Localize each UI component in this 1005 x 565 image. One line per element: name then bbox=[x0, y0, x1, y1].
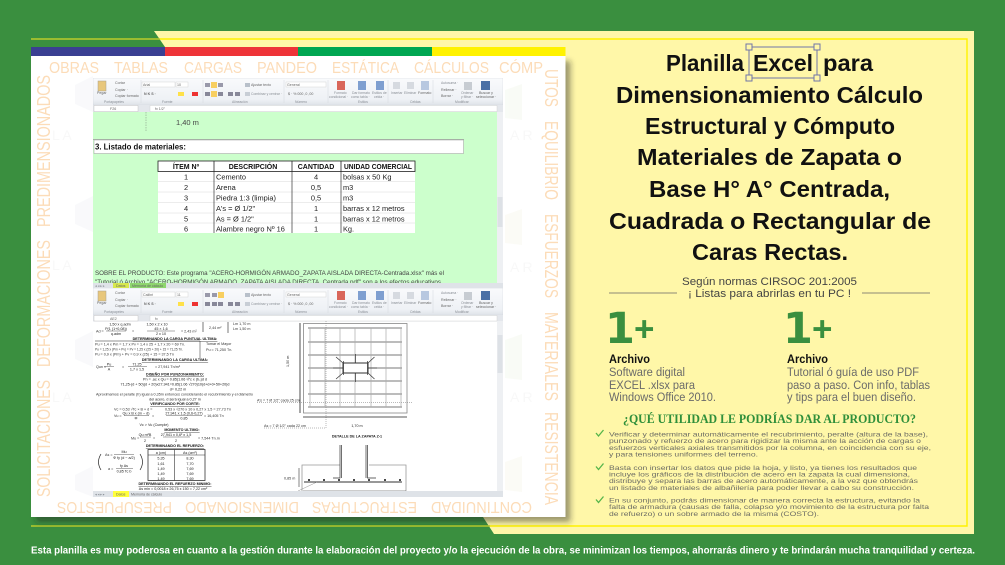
ribbon bottom: Formato bbox=[418, 301, 431, 305]
border words: left: SOLICITACIONES bbox=[34, 380, 54, 497]
sheet tabs bbox=[93, 491, 503, 497]
materials table: 4 bbox=[184, 204, 188, 213]
subtitle: Según normas CIRSOC 201:2005 bbox=[682, 276, 857, 288]
materials table: 5 bbox=[184, 214, 188, 224]
ribbon top: y filtrar · bbox=[461, 95, 473, 99]
calculation text: Vc = 0,53 √f'c × B × d = bbox=[114, 408, 152, 412]
reinforcement formula: Mu bbox=[121, 450, 127, 454]
ribbon bottom: Estilos de bbox=[372, 301, 387, 305]
calculation text: Tomar el Mayor bbox=[206, 342, 232, 346]
ribbon bottom: Borrar · bbox=[441, 304, 453, 308]
ribbon top: Arial bbox=[143, 83, 150, 87]
ribbon bottom: condicional · bbox=[329, 305, 348, 309]
ribbon bottom: Eliminar bbox=[404, 301, 417, 305]
ribbon bottom: Alineación bbox=[232, 310, 248, 314]
ribbon bottom: Ajustar texto bbox=[251, 293, 271, 297]
bullet: insert data: Basta con insertar los datos que pide la hoja, y listo, ya tienes los resultados que bbox=[609, 465, 917, 472]
calculation text: A bbox=[108, 368, 111, 372]
ribbon top: Copiar · bbox=[115, 88, 128, 92]
plan drawing of footing: A's = 7 Ø 1/2" cada 25 cm bbox=[257, 398, 300, 402]
ribbon top bbox=[93, 78, 503, 105]
ribbon bottom: $ · % 000 ,0 ,00 bbox=[288, 302, 313, 306]
ribbon top: $ · % 000 ,0 ,00 bbox=[288, 92, 313, 96]
steel iteration table: 7,69 bbox=[186, 472, 194, 476]
steel iteration table: 1,49 bbox=[157, 472, 165, 476]
border words: bottom bbox=[57, 498, 532, 515]
materials table: m3 bbox=[343, 194, 353, 202]
ribbon bottom: Portapapeles bbox=[104, 310, 124, 314]
calculation text: = bbox=[132, 330, 134, 334]
calculation text: 71,25 bbox=[132, 362, 142, 366]
steel iteration table: 7,69 bbox=[186, 467, 194, 471]
stat: PDF tutorial: Archivo bbox=[787, 352, 828, 366]
calculation text: Vu = bbox=[114, 414, 122, 418]
steel iteration table: As (cm²) bbox=[183, 451, 197, 455]
excel screenshot: materials list bbox=[93, 78, 503, 288]
materials table bbox=[158, 161, 415, 234]
ribbon top: Número bbox=[295, 100, 307, 104]
white sheet card bbox=[31, 56, 566, 517]
main title: para bbox=[823, 50, 873, 76]
ribbon bottom: como tabla · bbox=[351, 305, 370, 309]
materials table: 0,5 bbox=[311, 194, 321, 202]
border words: left bbox=[34, 75, 54, 497]
sheet tabs: ◂ ◂ ▸ ▸ bbox=[95, 492, 105, 496]
reinforcement formula: DETERMINANDO EL REFUERZO MINIMO: bbox=[138, 482, 212, 486]
calculation text: 2 bbox=[144, 439, 146, 443]
calculation text: Pu = 0,9 x (Pm) + Pv = 0,9 x (25) + 15 = 37,5 Tn bbox=[95, 352, 174, 356]
ribbon top: Rellenar · bbox=[441, 88, 457, 92]
plan drawing of footing: 1,70 m bbox=[351, 424, 363, 428]
reinforcement formula: fy As bbox=[120, 464, 128, 468]
ribbon top: Estilos bbox=[358, 100, 368, 104]
reinforcement formula: 0,85 f'c b bbox=[117, 470, 131, 474]
calculation text: 27,941 x 1,5 (0,6-0,27) bbox=[165, 412, 203, 416]
calculation text: Ad = bbox=[96, 330, 104, 334]
section detail drawing bbox=[284, 434, 406, 491]
formula bar bbox=[93, 105, 503, 112]
calculation text: Aproximamos el peralte (h) igual a 0,35m entonces considerando el recubrimiento y el diámetro bbox=[96, 392, 253, 396]
subtitle: ¡ Listas para abrirlas en tu PC ! bbox=[688, 288, 851, 300]
materials table: 1 bbox=[314, 204, 318, 213]
border words: left: PREDIMENSIONADOS bbox=[34, 75, 54, 227]
calculation text: del acero, d será igual a 0,27 m bbox=[149, 398, 201, 402]
calculation text: MOMENTO ULTIMO: bbox=[164, 428, 200, 432]
materials table: 1 bbox=[184, 172, 188, 182]
ribbon top: Celdas bbox=[410, 100, 421, 104]
calculation text: 2 x 10 bbox=[156, 332, 166, 336]
ribbon bottom: Celdas bbox=[410, 310, 421, 314]
border words: top: CÓMP bbox=[499, 60, 543, 77]
section detail drawing: DETALLE DE LA ZAPATA Z-1 bbox=[332, 434, 382, 438]
bullet: verify: Verificar y determinar automáticamente el recubrimiento, peralte (altura de la base), bbox=[609, 432, 928, 438]
border words: right: MATERIALES bbox=[541, 312, 561, 401]
calculation text: 71,25-(d + 50)(d + 20)x27,941=0.85(1.06 √270)10(d+d+0+50+20)d bbox=[121, 382, 229, 386]
main title: Excel bbox=[753, 50, 813, 76]
calculation text: 1,50 x q.adm bbox=[109, 322, 131, 326]
ribbon top: 10 bbox=[177, 83, 181, 87]
steel iteration table: 7,69 bbox=[186, 477, 194, 481]
sheet tabs: Memoria de cálculo bbox=[131, 492, 162, 496]
main title: Base H° A° Centrada, bbox=[649, 176, 890, 202]
calculation text: DETERMINANDO LA CARGA PUNTUAL ULTIMA: bbox=[133, 337, 217, 341]
utility heading: ¿QUÉ UTILIDAD LE PODRÍAS DAR AL PRODUCTO? bbox=[623, 411, 916, 426]
border words: right: UTOS bbox=[541, 69, 561, 107]
materials table: 4 bbox=[314, 172, 318, 182]
calculation text: Pu = 1,25 x (Pm + Pv) = Pv = 1,25 x (25 + 20) + 15 = 71,25 Tn. bbox=[95, 348, 183, 352]
ribbon top: celda · bbox=[374, 95, 384, 99]
ribbon top: Borrar · bbox=[441, 94, 453, 98]
steel iteration table: a (cm) bbox=[156, 451, 166, 455]
calculation text: Vc > Vu (Cumple) bbox=[139, 423, 169, 427]
faint logo watermarks: A R bbox=[510, 389, 533, 405]
ribbon bottom: Formato bbox=[334, 301, 347, 305]
calculation text: Lm 1,50 m bbox=[233, 327, 250, 331]
calculation text: 0,53 x √270 x 10 x 0,27 x 1,5 = 27,73 Tn bbox=[165, 408, 231, 412]
calculation text: Lm 1,70 m bbox=[233, 322, 250, 326]
faint logo watermarks: L A bbox=[52, 127, 72, 143]
calculation text bbox=[95, 322, 253, 448]
calculation text: = bbox=[152, 414, 154, 418]
materials table: As = Ø 1/2" bbox=[216, 214, 254, 224]
main title: Estructural y Cómputo bbox=[645, 113, 895, 139]
calculation text: Pu = 1,4 x Pm = 1,7 x Pv = 1,4 x 25 + 1,7 x 20 = 69 Tn. bbox=[95, 342, 185, 346]
ribbon bottom: Dar formato bbox=[352, 301, 370, 305]
colour strip bbox=[31, 47, 566, 56]
ribbon bottom: Calibri bbox=[143, 293, 153, 297]
calculation text: P(1 (1+0,08)) bbox=[105, 327, 127, 331]
bullet: overall: En su conjunto, podrás dimensionar de manera correcta la estructura, evitando la bbox=[609, 498, 920, 504]
sheet tabs: ◂ ◂ ▸ ▸ bbox=[95, 284, 105, 288]
border words: top: CÁLCULOS bbox=[414, 60, 489, 77]
calculation text: d= 0,22 m bbox=[170, 388, 186, 392]
calculation text: DETERMINANDO EL REFUERZO: bbox=[146, 444, 204, 448]
ribbon top: Fuente bbox=[162, 100, 173, 104]
calculation text: = bbox=[122, 365, 124, 369]
sheet tabs: Datos bbox=[116, 284, 126, 288]
calculation text: Pu bbox=[107, 362, 111, 366]
plan drawing of footing: 1,50 m bbox=[286, 356, 290, 367]
faint logo watermarks: A R bbox=[510, 127, 533, 143]
calculation text: Pu = 71,250 Tn. bbox=[206, 348, 232, 352]
materials table: Piedra 1:3 (limpia) bbox=[216, 194, 276, 202]
ribbon bottom: Rellenar · bbox=[441, 298, 457, 302]
sheet tabs: Datos bbox=[116, 492, 126, 496]
steel iteration table: 1,61 bbox=[157, 462, 165, 466]
plan drawing of footing bbox=[257, 321, 413, 428]
scrollbar bbox=[497, 112, 503, 283]
materials table: barras x 12 metros bbox=[343, 204, 405, 213]
ribbon bottom: Ordenar bbox=[461, 301, 474, 305]
ribbon top: Ajustar texto bbox=[251, 83, 271, 87]
main title: Planilla bbox=[666, 50, 744, 76]
calculation text: Qu m²B bbox=[139, 433, 152, 437]
calculation text: Φ bbox=[135, 416, 138, 420]
reinforcement formula: Φ fy (d − a/2) bbox=[113, 456, 135, 460]
ribbon top: Insertar bbox=[391, 91, 403, 95]
ribbon top: condicional · bbox=[329, 95, 348, 99]
calculation text: = 16,405 Tn bbox=[204, 414, 224, 418]
steel iteration table: 5,35 bbox=[157, 456, 165, 460]
calculation text: 2 bbox=[175, 439, 177, 443]
bullet: insert data: un listado de materiales de albañilería para poder llevar a cabo su construcción. bbox=[609, 485, 914, 492]
ribbon bottom: Insertar bbox=[391, 301, 403, 305]
section detail drawing: 0,85 m bbox=[284, 476, 295, 480]
calculation text: 1,50 x 2 x 10 bbox=[146, 322, 168, 326]
border words: left: DEFORMACIONES bbox=[34, 240, 54, 367]
main title: Materiales de Zapata o bbox=[637, 144, 902, 170]
border words: bottom: CONTINUIDAD bbox=[431, 498, 532, 515]
ribbon bottom: seleccionar · bbox=[476, 305, 496, 309]
calculation text: = 2,43 m² bbox=[181, 330, 197, 334]
materials table: DESCRIPCIÓN bbox=[229, 162, 277, 171]
ribbon bottom: N K S · bbox=[144, 302, 156, 306]
border words: top: OBRAS bbox=[49, 60, 99, 77]
border words: top: ESTÁTICA bbox=[332, 60, 400, 77]
sheet tabs: Memoria de cálculo bbox=[132, 284, 163, 288]
steel iteration table bbox=[148, 450, 205, 481]
border words: right: ESFUERZOS bbox=[541, 214, 561, 298]
main title: Caras Rectas. bbox=[692, 239, 848, 265]
formula bar bbox=[93, 315, 503, 322]
ribbon bottom: Buscar y bbox=[479, 301, 493, 305]
ribbon top: Copiar formato bbox=[115, 94, 139, 98]
calculation text: DISEÑO POR PUNZONAMIENTO: bbox=[146, 372, 204, 376]
bullet: overall: de refuerzo) o un sobre armado de la misma (COSTO). bbox=[609, 511, 819, 518]
calculation text: 1,7 x 1,5 bbox=[130, 368, 144, 372]
border words: bottom: PRESUPUESTOS bbox=[57, 498, 172, 515]
steel iteration table: 7,70 bbox=[186, 462, 194, 466]
calculation text: = 7,544 Tn.m bbox=[198, 436, 220, 440]
border words: top: CARGAS bbox=[184, 60, 242, 77]
ribbon bottom: Modificar bbox=[455, 310, 470, 314]
product note bbox=[95, 268, 444, 286]
bullet: overall: falta de armadura (causas de falla, colapso y/o movimiento de la estructura por falta bbox=[609, 504, 929, 511]
calculation text: DETERMINANDO LA CARGA ULTIMA: bbox=[142, 358, 208, 362]
calculation text: 45 × 1,6 bbox=[154, 327, 168, 331]
border words: top: PANDEO bbox=[257, 60, 317, 77]
calculation text: Qun = bbox=[96, 365, 106, 369]
bullet: verify bbox=[596, 430, 931, 459]
stat: Excel file bbox=[605, 304, 716, 404]
reinforcement formula bbox=[98, 450, 212, 491]
calculation text: 2,44 m² bbox=[209, 326, 222, 330]
ribbon top: Formato bbox=[418, 91, 431, 95]
calculation text: = 27,941 Tn/m² bbox=[155, 365, 181, 369]
stat: Excel file: + bbox=[634, 310, 654, 349]
ribbon bottom: celda · bbox=[374, 305, 384, 309]
materials table: UNIDAD COMERCIAL bbox=[344, 164, 413, 171]
ribbon top: Eliminar bbox=[404, 91, 417, 95]
formula bar: AE2 bbox=[110, 317, 117, 321]
materials table: A's = Ø 1/2" bbox=[216, 204, 256, 213]
stat: Excel file: Windows Office 2010. bbox=[609, 390, 716, 404]
selection box around Excel bbox=[746, 44, 820, 81]
stat: Excel file: 1 bbox=[605, 304, 635, 354]
ribbon bottom: Copiar formato bbox=[115, 304, 139, 308]
ribbon top: Combinar y centrar · bbox=[251, 92, 282, 96]
ribbon top: Cortar bbox=[115, 81, 126, 85]
bullet: verify: esfuerzos verticales axiales transmitidos por la columna, en coincidencia con su eje, bbox=[609, 445, 931, 452]
ribbon top: Dar formato bbox=[352, 91, 370, 95]
formula bar: fx bbox=[155, 317, 158, 321]
ribbon top: Alineación bbox=[232, 100, 248, 104]
materials table: Alambre negro Nº 16 bbox=[216, 224, 285, 234]
stat: PDF tutorial: + bbox=[812, 310, 832, 349]
ribbon top: como tabla · bbox=[351, 95, 370, 99]
excel screenshot: calculation memory bbox=[93, 288, 503, 497]
ribbon top: Modificar bbox=[455, 100, 470, 104]
materials table: 3 bbox=[184, 194, 188, 202]
reinforcement formula: As min = 0,0018 x 26,75 x 150 = 7,22 cm² bbox=[139, 487, 208, 491]
calculation text: = bbox=[153, 436, 155, 440]
steel iteration table: 1,49 bbox=[157, 477, 165, 481]
reinforcement formula: As = bbox=[105, 453, 112, 457]
ribbon bottom bbox=[93, 288, 503, 315]
stat: Excel file: EXCEL .xlsx para bbox=[609, 378, 695, 392]
steel iteration table: 8,30 bbox=[186, 456, 194, 460]
faint logo watermarks: L A bbox=[52, 257, 72, 273]
calculation text: q.adm bbox=[111, 332, 121, 336]
ribbon bottom: Número bbox=[295, 310, 307, 314]
stat: Excel file: Software digital bbox=[609, 365, 685, 379]
ribbon top: seleccionar · bbox=[476, 95, 496, 99]
faint logo watermarks bbox=[52, 76, 533, 497]
dimension 1,40 m: 1,40 m bbox=[176, 118, 199, 127]
border words: top bbox=[49, 60, 543, 77]
ribbon bottom: Estilos bbox=[358, 310, 368, 314]
ribbon bottom: Cortar bbox=[115, 291, 126, 295]
bullet: insert data: distribuye y separa las barras de acero automáticamente, a la vez que obtendrás bbox=[609, 478, 919, 485]
calculation text: VERIFICANDO POR CORTE: bbox=[150, 402, 200, 406]
plan drawing of footing: As = 7 Ø 1/2" cada 22 cm bbox=[264, 424, 306, 428]
faint logo watermarks: A R bbox=[510, 259, 533, 275]
ribbon bottom: Autosuma · bbox=[441, 291, 458, 295]
ribbon bottom: y filtrar · bbox=[461, 305, 473, 309]
subtitle bbox=[609, 276, 930, 300]
calculation text: Qu x B x (m − d) bbox=[123, 412, 149, 416]
border words: right: RESISTENCIA bbox=[541, 412, 561, 505]
ribbon top: Pegar bbox=[97, 91, 107, 95]
ribbon bottom: Copiar · bbox=[115, 298, 128, 302]
border words: bottom: DIMENSIONADO bbox=[185, 498, 299, 515]
ribbon top: Estilos de bbox=[372, 91, 387, 95]
ribbon top: Autosuma · bbox=[441, 81, 458, 85]
stat: PDF tutorial: Tutorial ó guía de uso PDF bbox=[787, 365, 919, 379]
bullet: insert data bbox=[596, 464, 919, 492]
materials table: 1 bbox=[314, 214, 318, 224]
border words: bottom: ESTRUCTURAS bbox=[312, 498, 417, 515]
ribbon top: N K S · bbox=[144, 92, 156, 96]
bullet: verify: punzonado y refuerzo de acero para rigidizar la misma ante la acción de cargas o bbox=[609, 438, 921, 445]
ribbon top: Buscar y bbox=[479, 91, 493, 95]
materials table: m3 bbox=[343, 183, 353, 192]
product note: "Tutorial ó Archivo "ACERO-HORMIGÓN ARMADO_ZAPATA AISLADA DIRECTA_Centrada.pdf" son a los efectos educativos bbox=[95, 277, 442, 286]
stat: PDF tutorial bbox=[783, 304, 930, 404]
stat: PDF tutorial: y tips para el buen diseño. bbox=[787, 390, 916, 404]
materials table: 6 bbox=[184, 224, 188, 234]
materials table: 1 bbox=[314, 224, 318, 234]
ribbon top: Ordenar bbox=[461, 91, 474, 95]
formula bar: fx 1/2" bbox=[155, 107, 166, 111]
bullet: insert data: incluye los gráficos de la distribución de acero en la zapata la cual dimensiona, bbox=[609, 472, 910, 478]
ribbon bottom: Pegar bbox=[97, 301, 107, 305]
calculation text: 0,85 bbox=[180, 416, 188, 420]
materials table: Arena bbox=[216, 183, 237, 192]
main title: Cuadrada o Rectangular de bbox=[609, 208, 931, 234]
stat: PDF tutorial: 1 bbox=[783, 304, 813, 354]
ribbon top: Portapapeles bbox=[104, 100, 124, 104]
materials table: bolsas x 50 Kg bbox=[343, 172, 391, 182]
bullet: overall bbox=[596, 496, 929, 518]
section heading: 3. Listado de materiales: bbox=[95, 142, 186, 152]
section heading bbox=[94, 140, 464, 154]
materials table: barras x 12 metros bbox=[343, 214, 405, 224]
bullet: verify: y para tensiones uniformes del terreno. bbox=[609, 452, 758, 459]
materials table: Cemento bbox=[216, 172, 246, 182]
ribbon bottom: Combinar y centrar · bbox=[251, 302, 282, 306]
steel iteration table: 1,49 bbox=[157, 467, 165, 471]
materials table: ÍTEM Nº bbox=[173, 162, 200, 171]
border words: right: EQUILIBRIO bbox=[541, 121, 561, 200]
ribbon top: General bbox=[287, 83, 300, 87]
materials table: CANTIDAD bbox=[298, 164, 334, 171]
main title bbox=[609, 50, 931, 265]
ribbon bottom: Fuente bbox=[162, 310, 173, 314]
reinforcement formula: a = bbox=[108, 467, 113, 471]
calculation text: 27,941 x 0,6² x 1,5 bbox=[161, 433, 191, 437]
ribbon top: Formato bbox=[334, 91, 347, 95]
product note: SOBRE EL PRODUCTO: Este programa "ACERO-HORMIGÓN ARMADO_ZAPATA AISLADA DIRECTA-Centrada.xlsx" más el bbox=[95, 268, 444, 277]
sheet tabs bbox=[93, 283, 503, 288]
stat: PDF tutorial: paso a paso. Con info, tablas bbox=[787, 378, 930, 392]
border words: top: TABLAS bbox=[114, 60, 168, 77]
scrollbar bbox=[497, 321, 503, 491]
stat: Excel file: Archivo bbox=[609, 352, 650, 366]
calculation text: Mu = bbox=[131, 436, 139, 440]
faint logo watermarks: L A bbox=[52, 389, 72, 405]
border words: right bbox=[541, 69, 561, 505]
dimension 1,40 m bbox=[146, 112, 199, 131]
materials table: Kg. bbox=[343, 224, 354, 234]
materials table: 2 bbox=[184, 183, 188, 192]
calculation text: Pn = .ac x Qu = 0.85(1.06 √f'c x (b₀)d d bbox=[143, 378, 207, 382]
main title: Dimensionamiento Cálculo bbox=[616, 82, 923, 108]
formula bar: F26 bbox=[110, 107, 116, 111]
ribbon bottom: 11 bbox=[177, 293, 181, 297]
materials table: 0,5 bbox=[311, 183, 321, 192]
ribbon bottom: General bbox=[287, 293, 300, 297]
